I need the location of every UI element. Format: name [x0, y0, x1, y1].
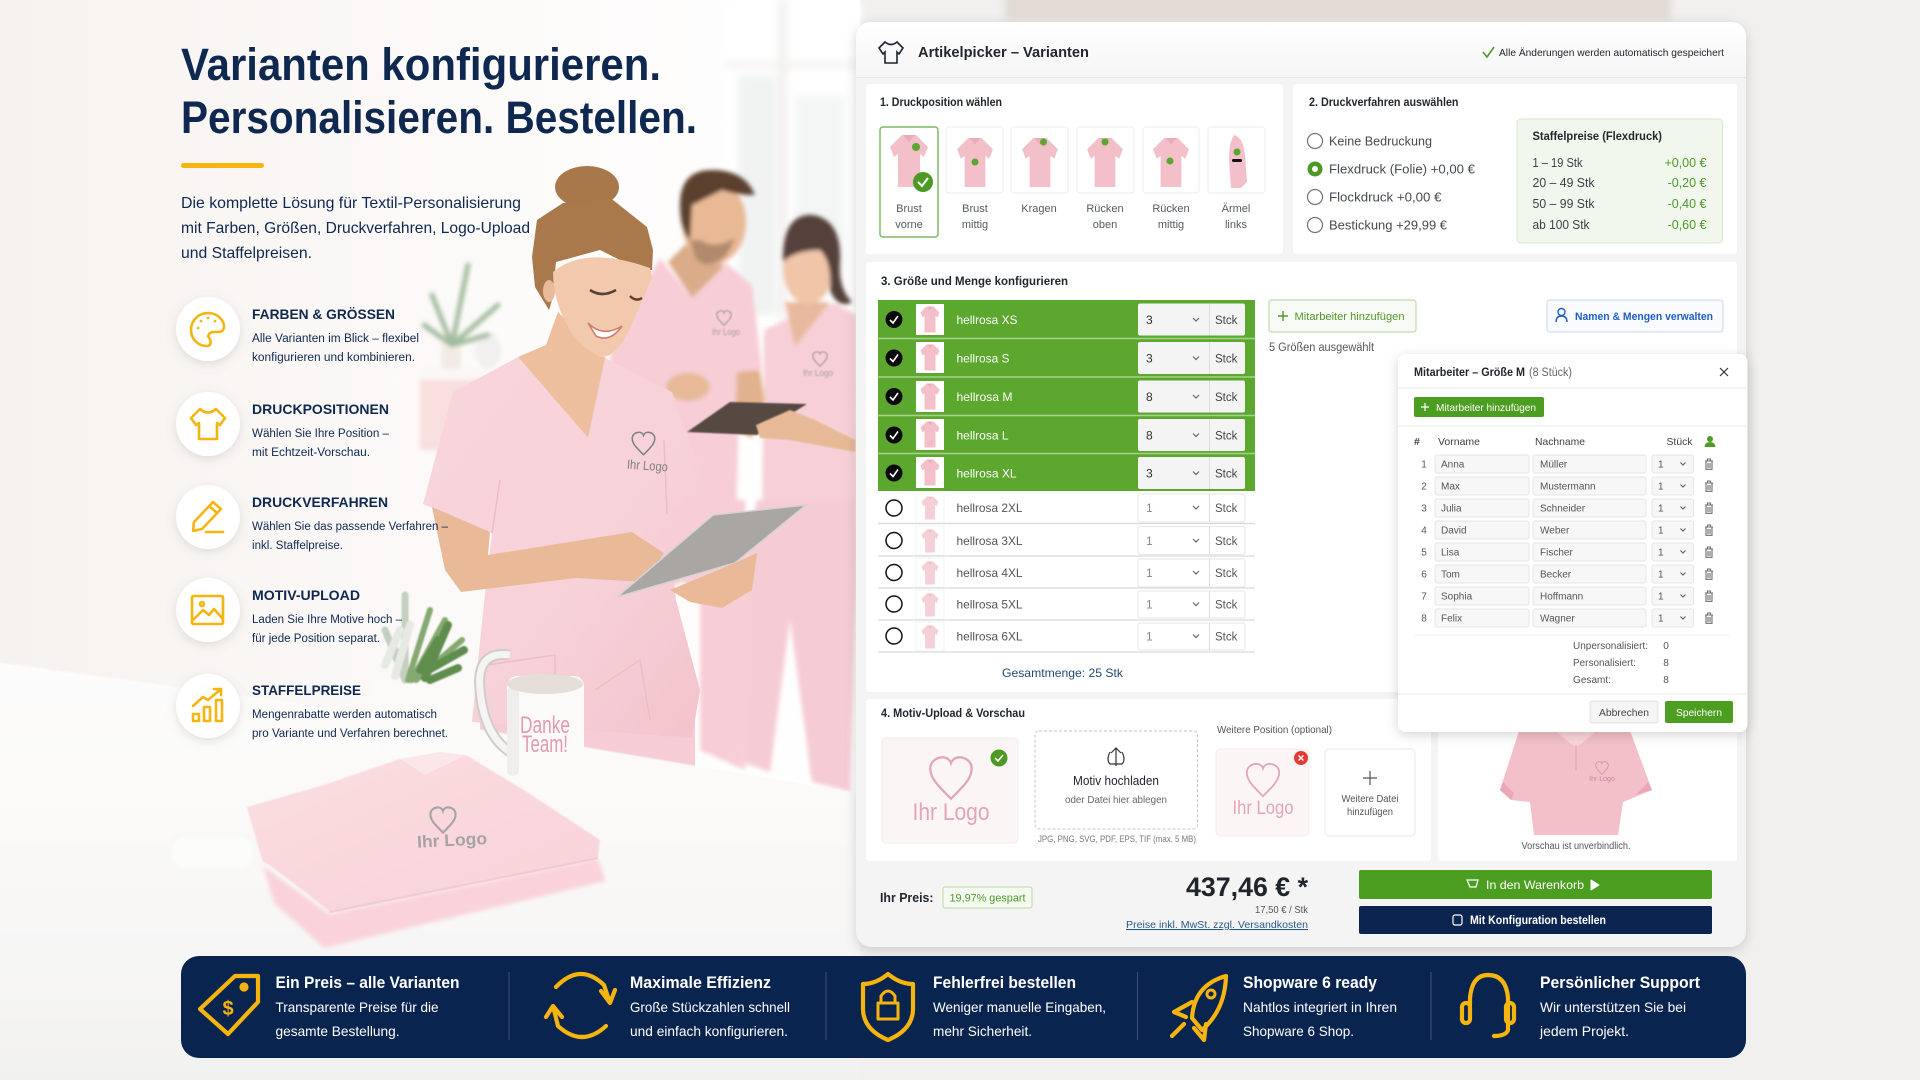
radio options: Keine Bedruckung [1329, 134, 1432, 148]
size row: 5XL [886, 590, 1245, 619]
row 6: 1 [1658, 570, 1664, 580]
upload dropzone: oder Datei hier ablegen [1065, 794, 1167, 806]
benefit: Maximale Effizienz: Große Stückzahlen schnell [630, 999, 790, 1015]
benefit: Persönlicher Support: Persönlicher Support [1540, 973, 1700, 992]
tile: Brust vorne selected: vorne [895, 219, 923, 231]
selection count: 5 Größen ausgewählt [1269, 342, 1375, 354]
Staffelpreise box: -0,40 € [1668, 197, 1707, 211]
size row: S: Stck [1215, 354, 1238, 366]
total price: 437,46 € * [1186, 872, 1308, 902]
icon: pencil [193, 502, 223, 532]
Staffelpreise box: ab 100 Stk [1532, 218, 1590, 232]
panel 4: Motiv-Upload [866, 699, 1431, 861]
heading: Personalisieren. Bestellen. [181, 92, 697, 143]
icon: image [192, 596, 223, 624]
polo shirt preview: Ihr Logo [1589, 776, 1615, 783]
icon: headset [1462, 975, 1514, 1036]
tile: Brust vorne selected: Brust [896, 203, 922, 215]
size row: XS: Stck [1215, 315, 1238, 327]
intro text: und Staffelpreisen. [181, 245, 312, 262]
tile: Kragen [1011, 127, 1068, 215]
row 8: Felix [1441, 614, 1462, 624]
row 7: 1 [1658, 592, 1664, 602]
neck [518, 312, 606, 438]
feature: Farben & Größen: konfigurieren und kombinieren. [252, 352, 415, 364]
benefit: Ein Preis: Ein Preis – alle Varianten [276, 973, 460, 992]
tile: Ärmel links: links [1225, 219, 1247, 231]
size row: 2XL: hellrosa 2XL [956, 501, 1023, 515]
feature: Staffelpreise [176, 674, 448, 740]
row 1: 1 [1658, 460, 1664, 470]
feature: Druckverfahren: Wählen Sie das passende Verfahren – [252, 521, 449, 533]
summary: Unpersonalisiert: [1573, 641, 1648, 652]
modal: Mitarbeiter [1398, 354, 1748, 732]
scrub top [423, 357, 708, 738]
row 6: Becker [1540, 570, 1572, 580]
blurred window [725, 0, 860, 340]
person: man, blurred [605, 170, 765, 600]
Staffelpreise box: 1 – 19 Stk [1532, 156, 1583, 170]
tablet [617, 505, 806, 597]
size row: S [886, 342, 1245, 374]
mug: Team! [522, 731, 568, 758]
feature: Motiv-Upload: MOTIV-UPLOAD [252, 587, 360, 603]
tile: Rücken mittig [1143, 127, 1199, 231]
row 5: 5 [1421, 548, 1427, 558]
row 3: Julia [1441, 504, 1462, 514]
row 5: Lisa [1441, 548, 1460, 558]
hand on tablet [670, 553, 757, 608]
benefit: Fehlerfrei bestellen: mehr Sicherheit. [933, 1023, 1032, 1039]
summary [1573, 641, 1669, 686]
table [0, 660, 860, 1080]
feature: Motiv-Upload: Laden Sie Ihre Motive hoch – [252, 614, 403, 626]
person: woman right, blurred [742, 215, 857, 792]
size row: 2XL: 1 [1146, 501, 1153, 515]
feature: Druckverfahren: DRUCKVERFAHREN [252, 494, 388, 510]
feature: Druckverfahren [176, 485, 449, 552]
tile: Rücken oben: Rücken [1086, 203, 1124, 215]
size row: M: Stck [1215, 392, 1238, 404]
yellow accent bar [181, 163, 264, 168]
size row: 4XL: 1 [1146, 566, 1153, 580]
size row: 4XL: Stck [1215, 568, 1238, 580]
chest logo: Ihr Logo [626, 457, 668, 474]
row 5: 1 [1658, 548, 1664, 558]
blurred table props [158, 778, 222, 812]
benefit: Ein Preis: gesamte Bestellung. [276, 1023, 400, 1039]
icon: t-shirt [191, 409, 225, 439]
row 2: Mustermann [1540, 482, 1596, 492]
size row: 5XL: Stck [1215, 600, 1238, 612]
benefit: Ein Preis: Transparente Preise für die [276, 999, 439, 1015]
bottom benefits bar [181, 956, 1746, 1058]
button: Mit Konfiguration bestellen: Mit Konfiguration bestellen [1470, 913, 1606, 927]
row 3: Schneider [1540, 504, 1586, 514]
mug [480, 654, 584, 781]
modal: Mitarbeiter: (8 Stück) [1529, 367, 1572, 379]
mug: Danke [520, 712, 570, 739]
button: Mit Konfiguration bestellen [1359, 906, 1712, 934]
size row: L [886, 419, 1245, 451]
tile: Brust mittig: Brust [962, 203, 988, 215]
icon: shield with lock [863, 974, 913, 1040]
benefit: Persönlicher Support: Wir unterstützen Sie bei [1540, 999, 1686, 1015]
row 4: 1 [1658, 526, 1664, 536]
benefit: Maximale Effizienz: Maximale Effizienz [630, 973, 771, 992]
card header: Alle Änderungen werden automatisch gespeichert [1499, 47, 1724, 59]
summary: 8 [1663, 658, 1669, 669]
add file tile: hinzufügen [1347, 807, 1393, 818]
folded shirts [247, 752, 606, 948]
button: add employee: Mitarbeiter hinzufügen [1436, 402, 1536, 414]
benefit: Persönlicher Support: jedem Projekt. [1539, 1023, 1629, 1039]
Staffelpreise box: 50 – 99 Stk [1532, 197, 1595, 211]
panel 2: Druckverfahren: 2. Druckverfahren auswählen [1309, 95, 1458, 109]
summary: 8 [1663, 675, 1669, 686]
size row: 3XL: Stck [1215, 536, 1238, 548]
intro text: mit Farben, Größen, Druckverfahren, Logo-Upload [181, 220, 530, 237]
button: Mitarbeiter hinzufügen [1269, 300, 1416, 332]
size row: XL: 3 [1146, 466, 1153, 480]
further position: Ihr Logo [1232, 798, 1294, 819]
size row: M: 8 [1146, 390, 1153, 404]
polo shirt preview [1500, 728, 1652, 835]
size row: 6XL: Stck [1215, 632, 1238, 644]
panel 2: Druckverfahren [1293, 84, 1737, 254]
total quantity: Gesamtmenge: 25 Stk [1002, 666, 1124, 680]
panel 4: Motiv-Upload: 4. Motiv-Upload & Vorschau [881, 706, 1025, 720]
row 1: Anna [1441, 460, 1465, 470]
saving badge: 19,97% gespart [950, 892, 1026, 904]
feature: Farben & Größen [176, 297, 419, 364]
row 6: Tom [1441, 570, 1460, 580]
tile: Brust vorne selected [880, 127, 938, 237]
size row: L: Stck [1215, 430, 1238, 442]
button: In den Warenkorb [1359, 870, 1712, 899]
size row: 2XL [886, 493, 1245, 523]
card header: Artikelpicker – Varianten [918, 44, 1089, 61]
card header [856, 22, 1746, 78]
row 1: Müller [1540, 460, 1568, 470]
main woman [423, 166, 806, 775]
button: Mitarbeiter hinzufügen: Mitarbeiter hinzufügen [1294, 311, 1404, 323]
button: Speichern: Speichern [1676, 707, 1722, 719]
blurred top strip behind card [1005, 0, 1671, 20]
upload dropzone: JPG, PNG, SVG, PDF, EPS, TIF (max. 5 MB) [1038, 834, 1196, 845]
feature: Farben & Größen: FARBEN & GRÖSSEN [252, 306, 395, 322]
feature: Farben & Größen: Alle Varianten im Blick – flexibel [252, 333, 419, 345]
feature: Druckpositionen: Wählen Sie Ihre Position – [252, 428, 390, 440]
Staffelpreise box: 20 – 49 Stk [1532, 176, 1595, 190]
size row: 4XL [886, 558, 1245, 587]
feature: Staffelpreise: pro Variante und Verfahren berechnet. [252, 728, 448, 740]
employee table header: Nachname [1535, 436, 1585, 448]
saving badge [943, 887, 1032, 908]
employee rows [1421, 455, 1713, 627]
size row: 6XL [886, 622, 1245, 651]
button: Abbrechen: Abbrechen [1599, 707, 1649, 719]
size row: L: hellrosa L [956, 428, 1009, 442]
price area: Ihr Preis: [880, 890, 934, 905]
row 3: 1 [1658, 504, 1664, 514]
man logo [712, 311, 740, 337]
size row: L: 8 [1146, 428, 1153, 442]
row 6: 6 [1421, 570, 1427, 580]
upload dropzone [1035, 731, 1198, 845]
row 8: 8 [1421, 614, 1427, 624]
panel 3: Größe und Menge: 3. Größe und Menge konfigurieren [881, 274, 1068, 288]
tile: Rücken oben: oben [1093, 219, 1117, 231]
intro text: Die komplette Lösung für Textil-Personalisierung [181, 195, 521, 212]
size row: 6XL: 1 [1146, 630, 1153, 644]
panel 1: Druckposition: 1. Druckposition wählen [880, 95, 1002, 109]
summary: Personalisiert: [1573, 658, 1636, 669]
blurred object on table [170, 835, 255, 870]
employee table header: Vorname [1438, 436, 1480, 448]
preview panel [1438, 699, 1737, 861]
row 2: Max [1441, 482, 1460, 492]
size row: 2XL: Stck [1215, 503, 1238, 515]
size row: XS: hellrosa XS [956, 313, 1018, 327]
tile: Ärmel links: Ärmel [1222, 203, 1250, 215]
row 1 [1421, 455, 1713, 473]
benefit: Ein Preis [200, 973, 460, 1039]
feature: Druckverfahren: inkl. Staffelpreise. [252, 540, 343, 552]
row 2: 2 [1421, 482, 1427, 492]
row 7: 7 [1421, 592, 1427, 602]
benefit: Shopware 6 ready: Nahtlos integriert in Ihren [1243, 999, 1397, 1015]
button: Namen & Mengen verwalten [1547, 300, 1723, 332]
size row: M [886, 380, 1245, 412]
price area [880, 870, 1712, 934]
uploaded logo tile: Ihr Logo [912, 799, 990, 826]
icon: palette [191, 313, 224, 346]
panel 1: Druckposition [866, 84, 1283, 254]
tile: Rücken oben [1077, 127, 1134, 231]
intro text [181, 195, 530, 262]
icon: check [1483, 47, 1494, 57]
preview panel: Vorschau ist unverbindlich. [1522, 841, 1630, 852]
button: Abbrechen [1590, 701, 1658, 723]
icon: rocket [1172, 976, 1226, 1040]
tile: Kragen: Kragen [1021, 203, 1057, 215]
upload dropzone: Motiv hochladen [1073, 774, 1159, 788]
employee table header [1414, 436, 1716, 448]
further position [1216, 724, 1332, 836]
feature: Druckpositionen: DRUCKPOSITIONEN [252, 401, 389, 417]
benefit: Fehlerfrei bestellen: Weniger manuelle Eingaben, [933, 999, 1106, 1015]
modal: Mitarbeiter: Mitarbeiter – Größe M [1414, 367, 1525, 379]
row 8 [1421, 609, 1713, 627]
face [553, 257, 652, 357]
further position: Weitere Position (optional) [1217, 724, 1332, 736]
tile: Brust mittig: mittig [962, 219, 988, 231]
icon: t-shirt outline [879, 42, 903, 63]
add file tile [1325, 749, 1415, 836]
price area: Preise inkl. MwSt. zzgl. Versandkosten [1126, 919, 1308, 931]
size row: 4XL: hellrosa 4XL [956, 566, 1023, 580]
row 3: 3 [1421, 504, 1427, 514]
button: add employee [1414, 397, 1544, 417]
feature: Staffelpreise: Mengenrabatte werden automatisch [252, 709, 437, 721]
feature: Motiv-Upload [176, 578, 403, 645]
row 2: 1 [1658, 482, 1664, 492]
benefit: Shopware 6 ready: Shopware 6 ready [1243, 973, 1377, 992]
size row: 5XL: 1 [1146, 598, 1153, 612]
panel 3: Größe und Menge [866, 262, 1737, 692]
size row: XL [886, 457, 1245, 489]
chest logo [626, 432, 668, 474]
size row: 3XL: hellrosa 3XL [956, 534, 1023, 548]
summary: 0 [1663, 641, 1669, 652]
tile: Ärmel links [1208, 127, 1265, 231]
size row: XL: Stck [1215, 468, 1238, 480]
size row: M: hellrosa M [956, 390, 1012, 404]
row 7: Sophia [1441, 592, 1473, 602]
benefit: Ein Preis: $ [222, 998, 234, 1020]
benefit: Maximale Effizienz: und einfach konfigurieren. [630, 1023, 788, 1039]
button: Namen & Mengen verwalten: Namen & Mengen verwalten [1575, 311, 1713, 323]
row 7 [1421, 587, 1713, 605]
row 2 [1421, 477, 1713, 495]
icon: refresh arrows [546, 974, 615, 1037]
man logo: Ihr Logo [712, 327, 740, 337]
configurator card [856, 22, 1746, 947]
background plant and shelf [420, 265, 520, 450]
pants [480, 700, 695, 775]
row 1: 1 [1421, 460, 1427, 470]
row 6 [1421, 565, 1713, 583]
price area: 17,50 € / Stk [1255, 904, 1309, 916]
row 3 [1421, 499, 1713, 517]
bun and hair [532, 166, 653, 310]
size row: XL: hellrosa XL [956, 466, 1017, 480]
feature: Motiv-Upload: für jede Position separat. [252, 633, 380, 645]
row 5 [1421, 543, 1713, 561]
size row: 3XL [886, 526, 1245, 555]
Staffelpreise box: -0,20 € [1668, 176, 1707, 190]
benefit: Maximale Effizienz [546, 973, 790, 1039]
woman right logo: Ihr Logo [803, 368, 833, 378]
ear [543, 280, 555, 302]
button: Speichern [1665, 701, 1733, 723]
size row: 6XL: hellrosa 6XL [956, 630, 1023, 644]
row 4: 4 [1421, 526, 1427, 536]
feature: Druckpositionen: mit Echtzeit-Vorschau. [252, 447, 370, 459]
size row: 3XL: 1 [1146, 534, 1153, 548]
woman right logo [803, 352, 833, 378]
arm and forearm [432, 507, 664, 592]
Staffelpreise box: +0,00 € [1664, 156, 1707, 170]
row 4: Weber [1540, 526, 1570, 536]
button: In den Warenkorb: In den Warenkorb [1486, 878, 1584, 892]
icon: rising chart [193, 689, 222, 721]
employee table header: # [1414, 436, 1420, 448]
Staffelpreise box [1517, 119, 1722, 243]
benefit: Shopware 6 ready: Shopware 6 Shop. [1243, 1023, 1354, 1039]
size row: 5XL: hellrosa 5XL [956, 598, 1023, 612]
uploaded logo tile [882, 738, 1018, 843]
icon: price tag [200, 976, 258, 1034]
radio options [1308, 134, 1476, 232]
row 8: 1 [1658, 614, 1664, 624]
eyes and smile [588, 290, 642, 338]
tile: Brust mittig [946, 127, 1003, 231]
size row: XS: 3 [1146, 313, 1153, 327]
radio options: Flexdruck (Folie) +0,00 € [1329, 162, 1476, 176]
benefit: Persönlicher Support [1462, 973, 1700, 1039]
heading: Varianten konfigurieren. [181, 39, 661, 90]
heading [181, 39, 697, 143]
close icon [1720, 368, 1728, 376]
selected size rows background [878, 300, 1255, 491]
employee table header: Stück [1666, 436, 1693, 448]
add file tile: Weitere Datei [1342, 794, 1398, 805]
benefit: Fehlerfrei bestellen: Fehlerfrei bestellen [933, 973, 1076, 992]
hand on clipboard [756, 410, 855, 452]
row 7: Hoffmann [1540, 592, 1583, 602]
summary: Gesamt: [1573, 675, 1611, 686]
tile: Rücken mittig: Rücken [1152, 203, 1190, 215]
clipboard [687, 402, 807, 435]
radio options: Bestickung +29,99 € [1329, 218, 1448, 232]
radio options: Flockdruck +0,00 € [1329, 190, 1442, 204]
row 4: David [1441, 526, 1467, 536]
plant on table [373, 595, 464, 752]
size row: S: 3 [1146, 352, 1153, 366]
row 8: Wagner [1540, 614, 1575, 624]
tile: Rücken mittig: mittig [1158, 219, 1184, 231]
feature: Staffelpreise: STAFFELPREISE [252, 682, 361, 698]
Staffelpreise box: -0,60 € [1668, 218, 1707, 232]
Staffelpreise box: Staffelpreise (Flexdruck) [1532, 129, 1662, 143]
feature: Druckpositionen [176, 392, 390, 459]
folded shirts: Ihr Logo [417, 829, 487, 852]
benefit: Shopware 6 ready [1172, 973, 1397, 1040]
lower background pants [610, 500, 752, 770]
size row: S: hellrosa S [956, 352, 1010, 366]
row 4 [1421, 521, 1713, 539]
size row: XS [886, 304, 1245, 336]
row 5: Fischer [1540, 548, 1573, 558]
benefit: Fehlerfrei bestellen [863, 973, 1106, 1040]
